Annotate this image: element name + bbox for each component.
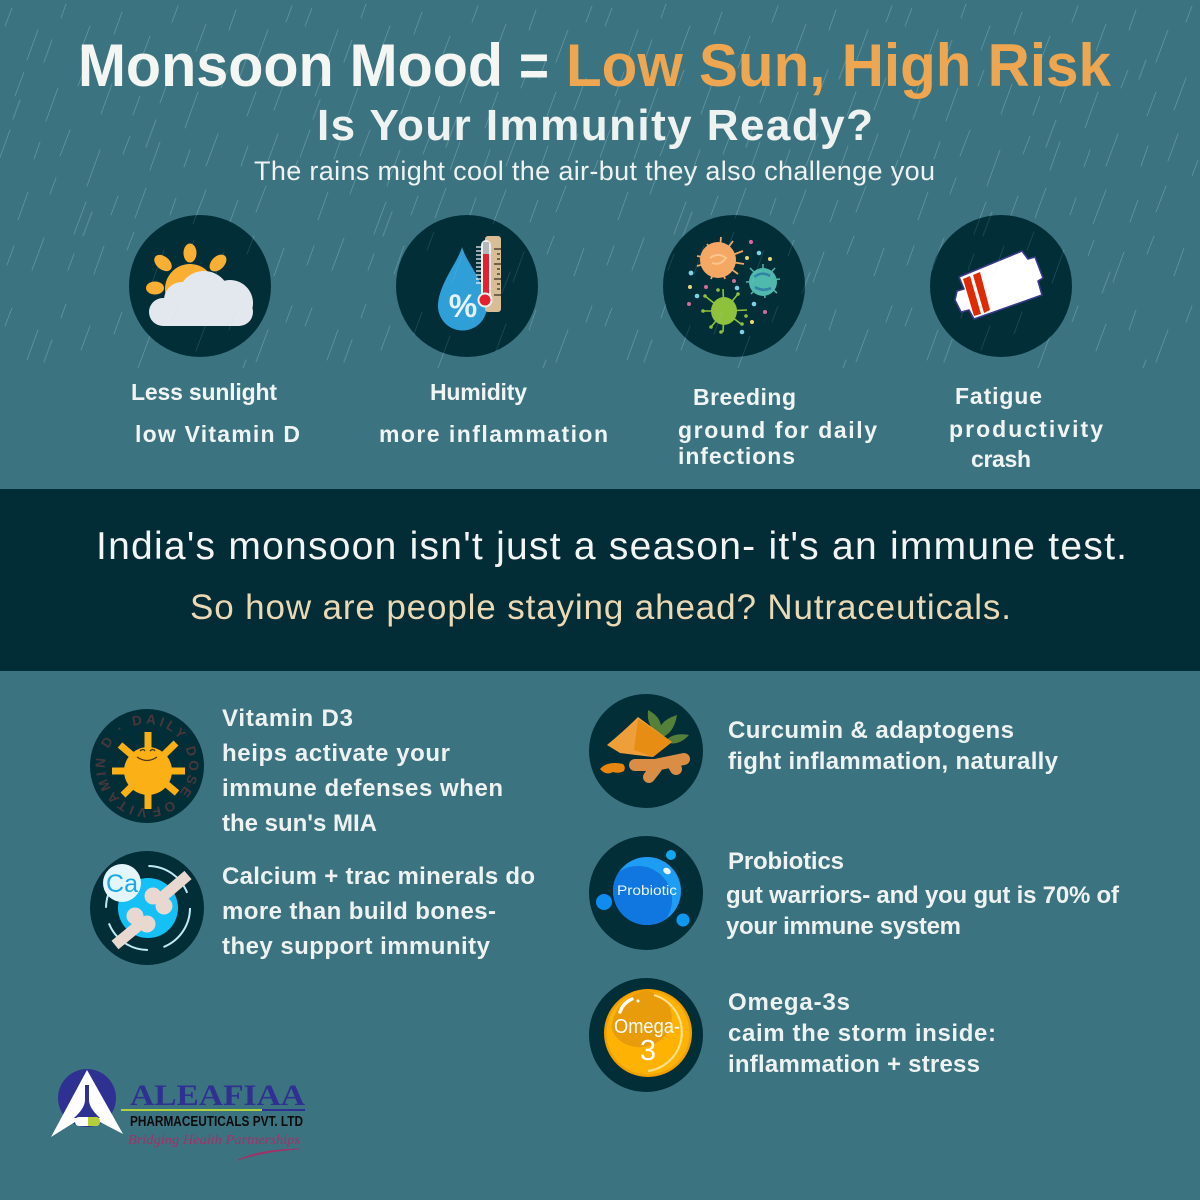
text: calcium: Calcium + trac minerals do bbox=[222, 863, 535, 890]
icon: sun and cloud bbox=[129, 215, 271, 357]
text: omega-3 bbox=[728, 989, 996, 1078]
label: fatigue: Fatigue bbox=[955, 383, 1042, 409]
logo: Aleafiaa Pharmaceuticals: ALEAFIAA bbox=[130, 1079, 305, 1112]
label: breeding ground: ground for daily bbox=[678, 417, 877, 443]
title: Monsoon Mood bbox=[78, 32, 503, 99]
label: breeding ground: infections bbox=[678, 443, 795, 469]
subtitle: Is Your Immunity Ready? bbox=[317, 101, 873, 150]
label: breeding ground bbox=[678, 384, 877, 469]
icon: probiotic bbox=[589, 836, 703, 950]
text: calcium: they support immunity bbox=[222, 933, 491, 960]
icon: humidity bbox=[396, 215, 538, 357]
label: breeding ground: Breeding bbox=[693, 384, 796, 410]
text: omega-3: caim the storm inside: bbox=[728, 1020, 996, 1047]
text: probiotics: your immune system bbox=[726, 913, 961, 940]
banner headline: India's monsoon isn't just a season- it's an immune test. bbox=[96, 525, 1127, 568]
icon: calcium and bone: Ca bbox=[106, 870, 138, 898]
text: calcium bbox=[222, 863, 535, 960]
title: Low Sun, High Risk bbox=[566, 32, 1112, 99]
logo: Aleafiaa Pharmaceuticals bbox=[51, 1069, 305, 1160]
text: vitamin D3: immune defenses when bbox=[222, 775, 503, 802]
text: curcumin: fight inflammation, naturally bbox=[728, 748, 1059, 775]
icon: omega-3 capsule bbox=[589, 978, 703, 1092]
text: vitamin D3: Vitamin D3 bbox=[222, 705, 353, 732]
panel: dark banner bbox=[0, 489, 1200, 671]
text: omega-3: inflammation + stress bbox=[728, 1051, 980, 1078]
text: vitamin D3: the sun's MIA bbox=[222, 810, 377, 837]
rain over icons bbox=[150, 215, 1064, 356]
rain texture bbox=[0, 0, 1200, 368]
icon: omega-3 capsule: 3 bbox=[640, 1035, 656, 1067]
label: less sunlight bbox=[131, 379, 300, 447]
label: humidity: more inflammation bbox=[379, 421, 608, 447]
icon: humidity: % bbox=[449, 288, 477, 324]
label: humidity bbox=[379, 379, 608, 447]
text: vitamin D3: heips activate your bbox=[222, 740, 450, 767]
text: curcumin: Curcumin & adaptogens bbox=[728, 717, 1014, 744]
text: probiotics: gut warriors- and you gut is 70% of bbox=[726, 882, 1120, 909]
label: fatigue bbox=[949, 383, 1103, 472]
label: humidity: Humidity bbox=[430, 379, 527, 405]
title: = bbox=[519, 32, 549, 99]
text: omega-3: Omega-3s bbox=[728, 989, 850, 1016]
icon: germs bbox=[663, 215, 805, 357]
text: probiotics bbox=[726, 848, 1120, 940]
label: fatigue: productivity bbox=[949, 416, 1103, 442]
text: curcumin bbox=[728, 717, 1059, 775]
label: less sunlight: Less sunlight bbox=[131, 379, 277, 405]
banner subline: So how are people staying ahead? Nutraceuticals. bbox=[190, 588, 1011, 627]
logo: Aleafiaa Pharmaceuticals: Bridging Health Partnerships bbox=[128, 1133, 301, 1148]
text: probiotics: Probiotics bbox=[728, 848, 844, 875]
icon: omega-3 capsule: Omega- bbox=[614, 1016, 680, 1038]
title bbox=[78, 32, 1112, 99]
icon: vitamin D sun: VITAMIN D · DAILY DOSE OF bbox=[96, 714, 198, 818]
label: fatigue: crash bbox=[971, 446, 1031, 472]
logo: Aleafiaa Pharmaceuticals: PHARMACEUTICALS PVT. LTD bbox=[130, 1114, 303, 1130]
text: calcium: more than build bones- bbox=[222, 898, 496, 925]
text: vitamin D3 bbox=[222, 705, 503, 837]
icon: turmeric bbox=[589, 694, 703, 808]
tagline: The rains might cool the air-but they also challenge you bbox=[254, 156, 935, 186]
icon: probiotic: Probiotic bbox=[617, 883, 677, 898]
label: less sunlight: low Vitamin D bbox=[135, 421, 300, 447]
icon: calcium and bone bbox=[90, 851, 204, 965]
icon: low battery bbox=[930, 215, 1072, 357]
